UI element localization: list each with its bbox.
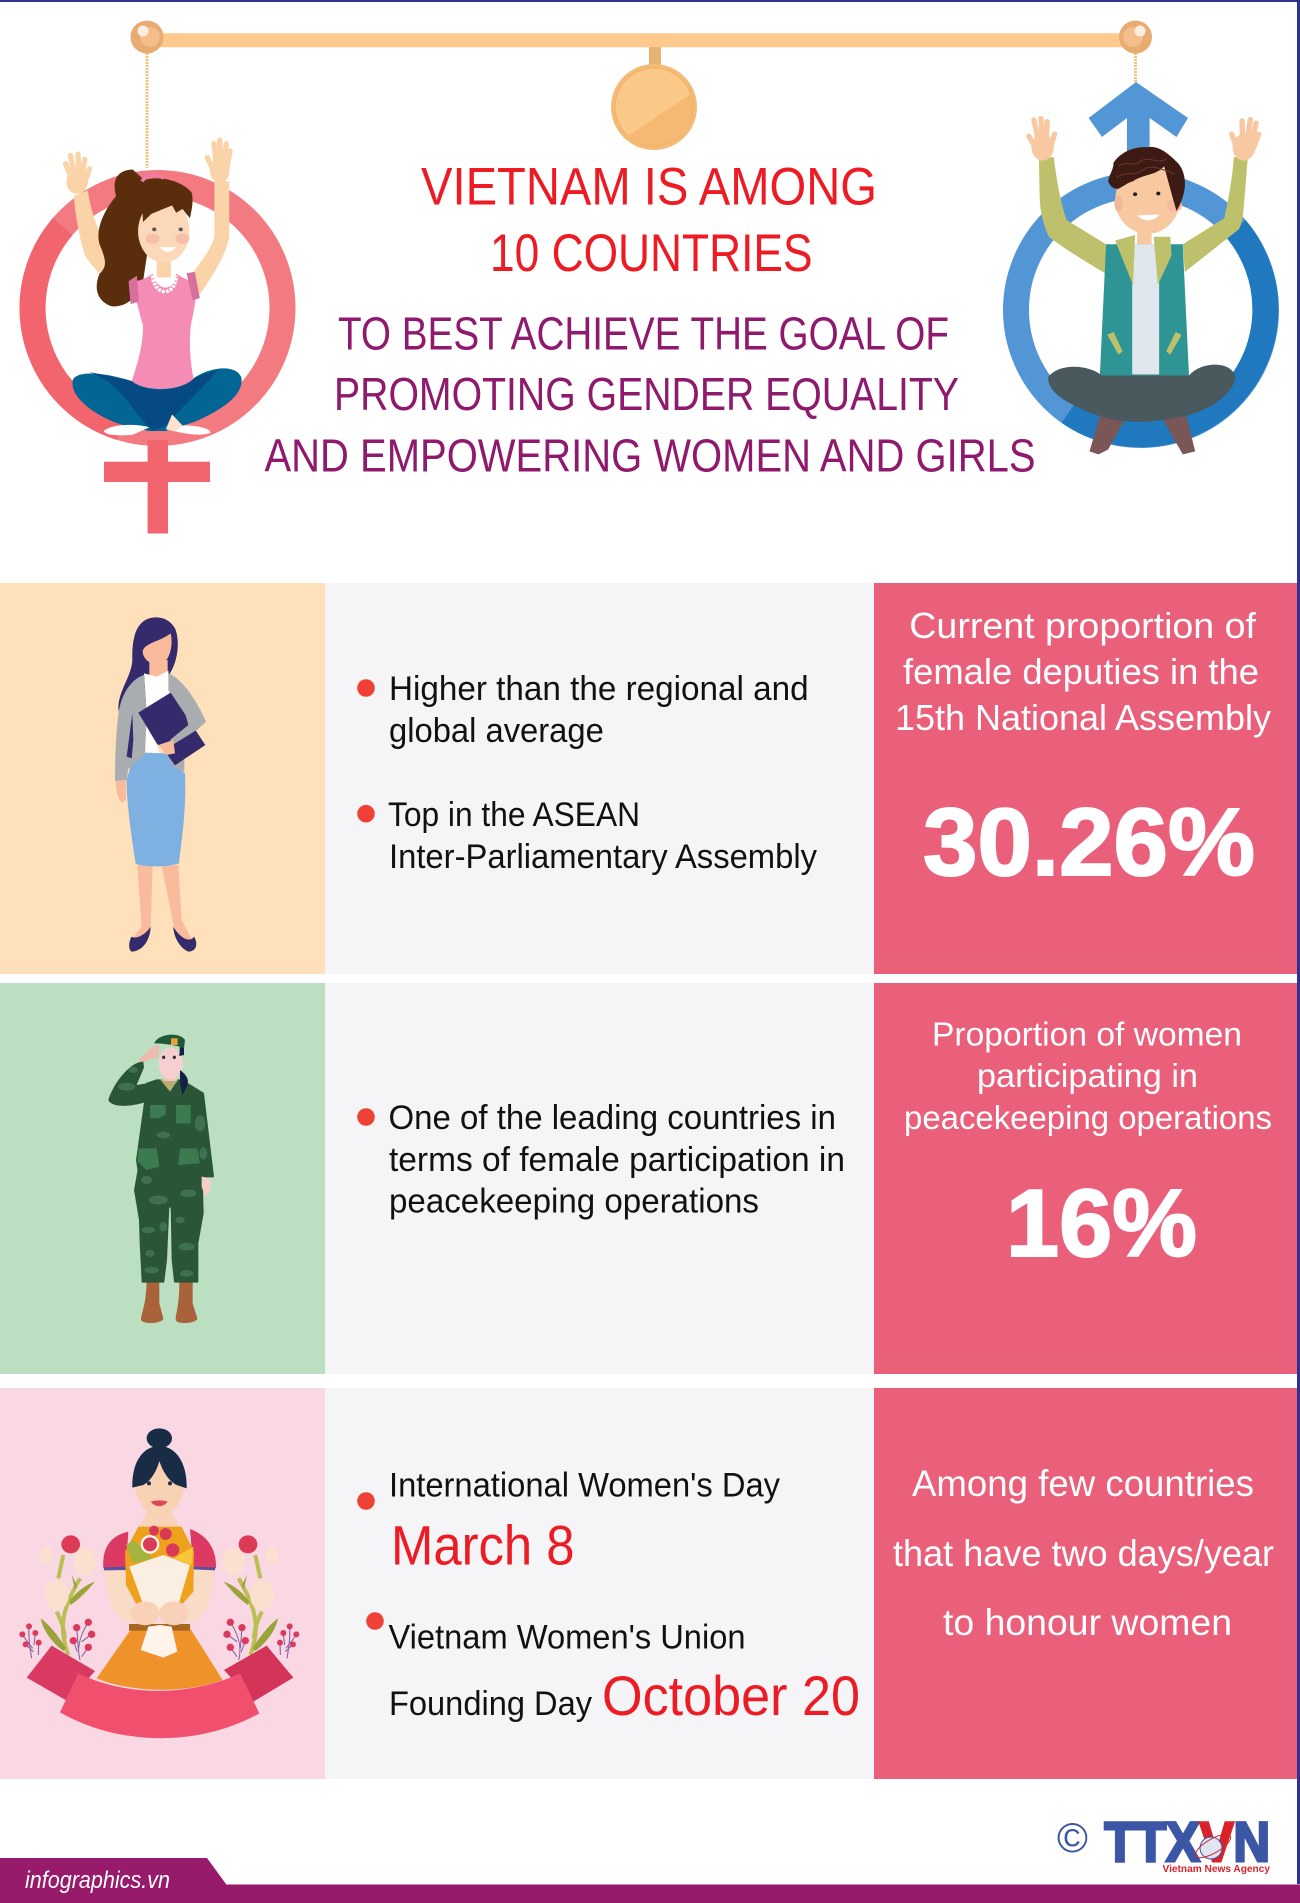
bullet list: global average xyxy=(389,712,604,750)
statistic: 30.26%: 30.26% xyxy=(923,789,1255,896)
subheading: TO BEST ACHIEVE THE GOAL OF xyxy=(338,308,949,360)
dates text: March 8 xyxy=(391,1513,574,1576)
statistic: 16%: peacekeeping operations xyxy=(904,1099,1272,1136)
statistic: 30.26%: Current proportion of xyxy=(909,605,1257,646)
dates text: International Women's Day xyxy=(389,1467,780,1505)
bullet text: peacekeeping operations xyxy=(389,1183,759,1221)
statistic: 30.26% xyxy=(895,605,1271,896)
illustration: businesswoman with folder xyxy=(115,617,206,952)
statistic: 16% xyxy=(904,1016,1272,1277)
callout: two days a year: Among few countries xyxy=(912,1463,1254,1504)
balance scale beam with medal xyxy=(130,20,1152,168)
statistic: 16%: 16% xyxy=(1006,1170,1197,1277)
bullet text: terms of female participation in xyxy=(389,1141,845,1179)
dates text: October 20 xyxy=(602,1664,860,1727)
logo: TTXVN Vietnam News Agency: Vietnam News Agency xyxy=(1162,1864,1270,1875)
left floral sprig xyxy=(19,1535,96,1660)
statistic: 30.26%: 15th National Assembly xyxy=(895,697,1271,738)
callout: two days a year: that have two days/year xyxy=(893,1533,1274,1574)
dates text: Vietnam Women's Union xyxy=(388,1618,746,1656)
main heading: VIETNAM IS AMONG xyxy=(421,158,877,217)
bullet list: Higher than the regional and xyxy=(389,670,809,708)
male symbol xyxy=(1016,82,1266,435)
panel: women's days xyxy=(0,1388,1297,1779)
right floral sprig xyxy=(223,1535,299,1660)
subheading: PROMOTING GENDER EQUALITY xyxy=(334,368,959,420)
main heading: 10 COUNTRIES xyxy=(490,224,812,283)
illustration: saluting female soldier xyxy=(108,1035,213,1323)
logo: TTXVN Vietnam News Agency: TTXVN xyxy=(1104,1810,1270,1873)
bullet text xyxy=(357,1099,845,1221)
dates text: Founding Day xyxy=(389,1685,592,1723)
bullet text: One of the leading countries in xyxy=(388,1099,836,1137)
illustration: woman with bouquet and ribbon xyxy=(19,1428,299,1738)
logo: TTXVN Vietnam News Agency: © xyxy=(1057,1814,1088,1861)
statistic: 16%: Proportion of women xyxy=(932,1016,1242,1053)
female symbol xyxy=(32,183,282,534)
main heading xyxy=(421,158,877,283)
dates text xyxy=(357,1467,860,1727)
subheading: AND EMPOWERING WOMEN AND GIRLS xyxy=(264,430,1036,482)
bullet list xyxy=(357,670,817,876)
bullet list: Inter-Parliamentary Assembly xyxy=(389,838,817,876)
statistic: 16%: participating in xyxy=(977,1057,1198,1094)
panel: peacekeeping xyxy=(0,983,1297,1374)
statistic: 30.26%: female deputies in the xyxy=(903,651,1259,692)
footer band xyxy=(0,1858,1300,1903)
callout: two days a year xyxy=(893,1463,1274,1643)
subheading xyxy=(264,308,1036,482)
illustration: woman sitting cross-legged xyxy=(66,140,242,435)
source label: infographics.vn xyxy=(25,1867,170,1894)
illustration: man sitting cross-legged xyxy=(1029,118,1259,454)
bullet list: Top in the ASEAN xyxy=(388,796,640,834)
callout: two days a year: to honour women xyxy=(943,1602,1232,1643)
panel: female deputies xyxy=(0,583,1297,974)
